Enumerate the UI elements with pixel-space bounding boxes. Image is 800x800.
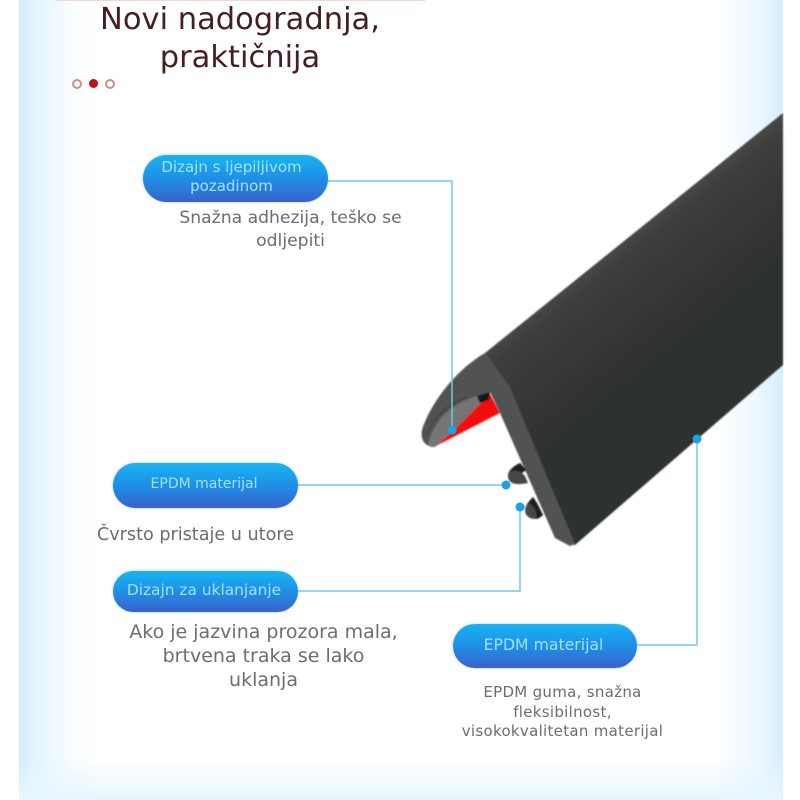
title — [100, 2, 380, 75]
text: adhesion: odljepiti — [256, 231, 325, 251]
upper barb — [508, 463, 528, 484]
text: EPDM description — [462, 683, 663, 740]
text: removal description: Ako je jazvina prozora mala, — [129, 621, 398, 643]
red adhesive — [434, 394, 500, 447]
lip inner band — [428, 396, 484, 447]
text: EPDM description: visokokvalitetan materijal — [462, 722, 663, 740]
pill: adhesive backing: Dizajn s ljepiljivom — [161, 158, 302, 176]
connector: EPDM material right — [637, 434, 702, 645]
notch — [477, 392, 490, 403]
text: removal description: uklanja — [229, 669, 298, 691]
title dots — [72, 79, 115, 89]
pill: EPDM material right: EPDM materijal — [484, 635, 603, 654]
text: adhesion: Snažna adhezija, teško se — [179, 208, 402, 228]
strip lip — [422, 353, 575, 546]
pill: removal design: Dizajn za uklanjanje — [127, 581, 281, 599]
connector: EPDM material — [298, 480, 510, 490]
product: rubber seal strip — [422, 113, 783, 546]
pill: adhesive backing: pozadinom — [190, 177, 273, 195]
connector: adhesive backing — [328, 181, 456, 434]
text: adhesion — [179, 208, 402, 251]
text: EPDM description: fleksibilnost, — [513, 702, 612, 720]
title: praktičnija — [160, 40, 320, 75]
text: removal description: brtvena traka se lako — [163, 645, 364, 667]
pill: adhesive backing — [143, 155, 328, 202]
lower barb — [525, 497, 543, 519]
pill: EPDM material: EPDM materijal — [151, 476, 257, 492]
strip main face — [485, 113, 783, 545]
text: EPDM description: EPDM guma, snažna — [483, 683, 642, 701]
pill: EPDM material right — [453, 624, 637, 668]
text: removal description — [129, 621, 398, 691]
title: Novi nadogradnja, — [100, 2, 380, 37]
connector: removal design — [298, 502, 524, 591]
pill: EPDM material — [113, 463, 298, 508]
lip groove — [427, 397, 467, 434]
text: fits grooves: Čvrsto pristaje u utore — [97, 525, 294, 545]
pill: removal design — [113, 571, 298, 612]
